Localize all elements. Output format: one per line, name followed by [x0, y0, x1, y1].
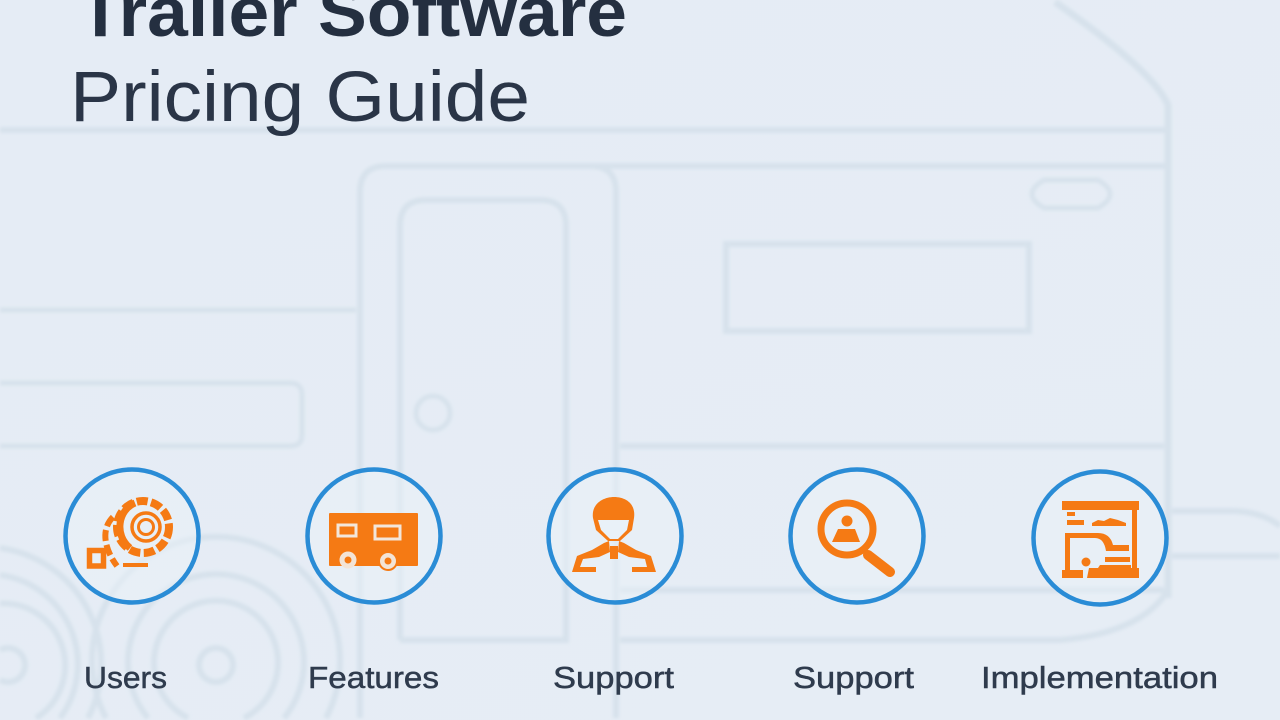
icon: person with headset	[572, 497, 656, 572]
label: Support: Support	[553, 660, 674, 695]
icon: workshop machine	[1062, 501, 1139, 578]
title line 2: Pricing Guide	[70, 58, 530, 137]
label: Features: Features	[308, 660, 439, 695]
item: Features	[308, 470, 440, 695]
label: Support 2: Support	[793, 660, 914, 695]
item: Users	[66, 470, 198, 695]
icon ring: Features	[308, 470, 440, 602]
title	[70, 0, 627, 137]
left wheel	[0, 648, 25, 682]
icon ring: Implementation	[1034, 472, 1166, 604]
icon: magnifier with person	[821, 503, 890, 572]
item: Support (technician)	[548, 470, 682, 695]
icon: gear and tag	[90, 501, 169, 566]
icon ring: Support search	[790, 470, 924, 602]
icon ring: Users	[66, 470, 198, 602]
icon: trailer	[329, 513, 418, 570]
item: Implementation	[981, 472, 1218, 695]
label: Implementation: Implementation	[981, 660, 1218, 695]
item: Support (search)	[790, 470, 924, 695]
right wheel	[199, 648, 233, 682]
label: Users: Users	[84, 660, 167, 695]
icon ring: Support	[548, 470, 682, 602]
